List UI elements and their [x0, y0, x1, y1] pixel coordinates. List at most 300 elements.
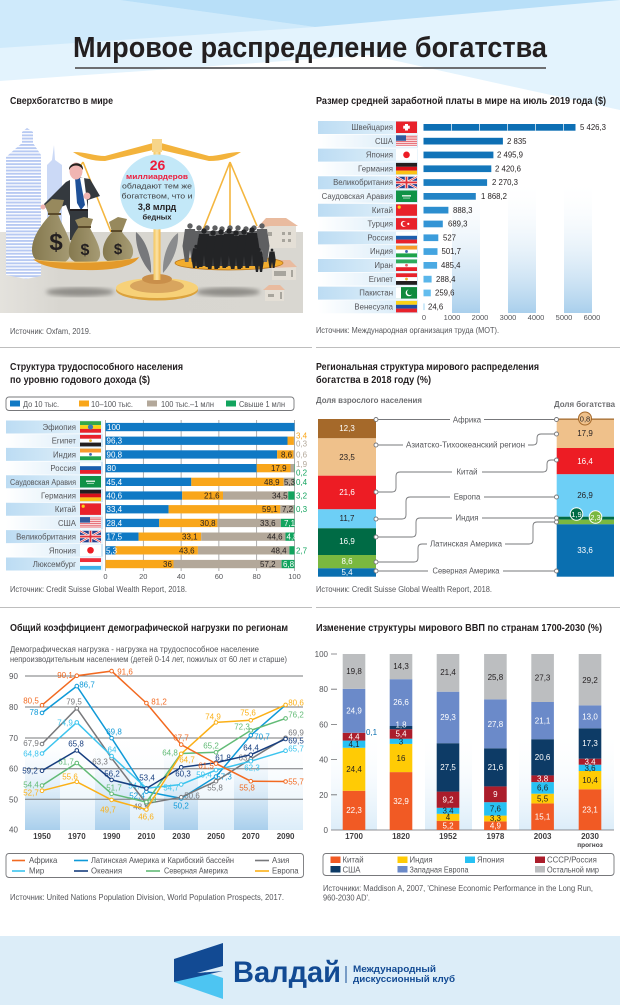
bar: 1700: 22,3 [346, 806, 362, 815]
chart background stripes [452, 180, 592, 313]
stacked bar chart: income: 3,2 [296, 492, 308, 500]
y axis: 0 [324, 826, 329, 835]
x axis labels [345, 832, 604, 849]
heading: income structure: по уровню годового дохода ($) [10, 375, 150, 386]
line: Latin America: 70,7 [254, 732, 270, 742]
y axis: 60 [319, 720, 329, 729]
illustration: right houses [257, 218, 298, 301]
illustration: money bags [32, 199, 133, 265]
line: Northern America: 61,7 [58, 758, 74, 766]
stacked bar chart: income: 7,1 [284, 519, 296, 528]
background columns [331, 730, 614, 830]
legend: regions: Африка [29, 856, 58, 865]
column: population: 5,4 [341, 568, 353, 577]
bar: 1978: 4,9 [490, 822, 502, 830]
axis: income: 100 [288, 572, 301, 581]
x axis labels: 1950 [33, 832, 51, 841]
logo: Valdai wordmark: дискуссионный клуб [353, 974, 455, 985]
bar chart: wages: 527 [443, 233, 456, 242]
line: World: 74,9 [57, 718, 73, 728]
heading: income structure: Структура трудоспособного населения [10, 361, 183, 373]
bar: 2030 forecast [579, 654, 601, 830]
legend: GDP: СССР/Россия [547, 856, 597, 864]
title: Мировое распределение богатства [73, 32, 548, 64]
bar: 2003: 3,8 [537, 774, 549, 784]
stacked bar chart: income: 8,6 [281, 450, 293, 459]
connectors and region labels: Индия [455, 514, 479, 522]
country rows with labels and flags: Великобритания [333, 178, 393, 187]
country rows with labels and flags: Саудовская Аравия [322, 192, 393, 201]
bar: 1700: 4,4 [348, 732, 360, 742]
line: Latin America [30, 680, 286, 810]
line: Oceania: 60,3 [175, 770, 191, 778]
x axis labels: 1952 [439, 832, 457, 841]
source: Maddison [323, 884, 593, 902]
line: Africa: 80,5 [23, 696, 39, 706]
heading: GDP: Изменение структуры мирового ВВП по странам 1700-2030 (%) [316, 623, 602, 634]
stacked bar chart: income: 33,1 [182, 533, 198, 542]
bar: 2003: 6,6 [537, 784, 549, 792]
axis: income: 20 [139, 572, 147, 581]
bar: 1820: 26,6 [393, 698, 409, 707]
bar chart: wages: 2 270,3 [492, 178, 518, 187]
stacked bar chart: income: 0,2 [296, 469, 308, 478]
panel: income structure [6, 361, 308, 594]
column: wealth [557, 418, 614, 577]
axis: wage [422, 313, 600, 322]
line: Europe: 49,7 [100, 806, 116, 814]
y axis labels: 40 [9, 826, 18, 835]
bar: 1952: 3,4 [442, 806, 454, 816]
axis: income: 60 [215, 572, 223, 581]
column: wealth: 26,9 [577, 491, 593, 500]
axis: wage: 6000 [584, 313, 600, 322]
logo: Valdai wordmark [233, 956, 455, 989]
axis: income: 80 [253, 572, 261, 581]
bar: 1978 [484, 654, 507, 830]
badge: India 1.9: 1,9 [571, 510, 582, 519]
legend: income: 10–100 тыс. [91, 400, 133, 409]
column: population: 21,6 [339, 488, 355, 497]
line: Asia: 63 [239, 754, 248, 762]
country rows: Россия [50, 464, 76, 473]
legend: GDP: США [342, 866, 361, 874]
country rows with labels and flags: Китай [372, 206, 393, 215]
line: Oceania: 61,8 [215, 754, 231, 762]
stacked bar chart: income: 7,2 [282, 505, 294, 514]
stacked bar chart: income: 6,8 [283, 560, 295, 569]
bar: 1952: 9,2 [442, 796, 454, 804]
stacked bar chart: income: 30,8 [200, 519, 216, 528]
source: Maddison: Источники: Maddison A, 2007, 'Chinese Economic Performance in the Long Run, [323, 884, 593, 893]
heading: regional [316, 362, 539, 386]
line: World: 54,5 [128, 782, 144, 790]
bar chart: wages: 288,4 [436, 275, 456, 284]
axis: income: 0 [103, 572, 108, 581]
line: Africa: 90,1 [57, 671, 73, 680]
line: Africa: 91,6 [117, 668, 133, 676]
chart background columns [25, 735, 303, 830]
badge: Africa 0.8: 0,8 [580, 414, 590, 424]
line: Oceania: 69,5 [288, 736, 304, 746]
bar: 1978: 3,3 [490, 814, 502, 823]
stacked bar chart: income: 0,3 [296, 439, 308, 448]
stacked bar chart: income: 17,5 [106, 533, 123, 542]
line: Northern America: 64,8 [162, 748, 178, 758]
country rows with labels and flags [318, 121, 418, 313]
line: Latin America: 78 [30, 708, 39, 717]
source: oxfam: Источник: Oxfam, 2019. [10, 327, 91, 336]
stacked bar chart: income: 40,6 [106, 492, 123, 500]
panel: regional wealth structure [316, 362, 615, 594]
axis: wage: 0 [422, 313, 426, 322]
line: Latin America: 86,7 [79, 680, 95, 690]
callout: 26 billionaires [120, 154, 195, 230]
country rows with labels and flags: Пакистан [359, 289, 393, 298]
legend: regions: Азия [272, 856, 289, 865]
x axis labels: 2090 [277, 832, 295, 841]
stacked bar chart: income: 5,3 [106, 546, 118, 555]
bar: 1820: 14,3 [393, 662, 409, 671]
stacked bar chart: income: 33,4 [106, 505, 123, 514]
country rows with labels and flags: Индия [370, 247, 393, 256]
x axis labels: 1820 [392, 832, 410, 841]
heading: regional: богатства в 2018 году (%) [316, 374, 431, 386]
line: World: 54,7 [163, 784, 179, 792]
illustration: ground [0, 232, 303, 313]
y axis labels [9, 672, 18, 835]
stacked bar chart: income: 45,4 [106, 478, 123, 487]
axis: wage: 5000 [556, 313, 572, 322]
line: World: 64 [108, 746, 117, 754]
stacked bar chart: income: 59,1 [262, 505, 278, 514]
panel: average wage [316, 95, 606, 335]
line: Africa: 61,5 [198, 762, 214, 770]
bar: 1952: 27,5 [440, 763, 456, 772]
country rows with labels and flags: Германия [358, 164, 393, 173]
y axis labels: 90 [9, 672, 18, 681]
callout: 26 billionaires: бедных [142, 212, 172, 222]
x axis labels: 2030 [172, 832, 191, 841]
bar: 1820: 5,4 [395, 730, 407, 738]
stacked bar chart: income: 43,6 [179, 546, 195, 555]
bar: 1700: 24,9 [346, 706, 362, 716]
x axis labels: 2010 [138, 832, 156, 841]
bar: 2003: 20,6 [535, 753, 551, 762]
country rows: Люксембург [33, 560, 76, 569]
footer band [0, 936, 620, 1005]
line: World: 64,8 [23, 750, 39, 758]
line: Northern America: 51,7 [106, 784, 122, 792]
line: Europe: 46,6 [138, 812, 154, 822]
line: Asia: 79,5 [66, 698, 82, 706]
column: population: 12,3 [339, 424, 355, 433]
line: Northern America: 54,4 [23, 780, 39, 790]
callout: 26 billionaires: обладают тем же [122, 182, 192, 190]
line: Europe: 64,7 [179, 756, 195, 764]
bar chart: wages: 689,3 [448, 220, 468, 229]
axis label: wealth share: Доля богатства [554, 399, 615, 409]
bar: 1952 [437, 654, 459, 830]
stacked bar chart: income: 48,4 [271, 546, 287, 555]
bar: 1978: 7,6 [490, 804, 502, 814]
stacked bar chart: income: 17,9 [271, 464, 287, 473]
stacked bar chart: income: 0,4 [296, 478, 308, 487]
line: Northern America: 72,3 [234, 722, 250, 732]
legend: GDP [323, 854, 614, 876]
logo: Valdai mark [174, 943, 223, 999]
stacked bar chart: income: 34,5 [272, 492, 288, 500]
y axis: 40 [319, 756, 329, 765]
badge: Latin America 2.3 [589, 511, 602, 523]
bar chart: wages: 2 495,9 [497, 151, 523, 160]
line: World: 65,7 [288, 744, 304, 754]
legend: GDP: Индия [410, 856, 433, 864]
line: Northern America [23, 710, 304, 804]
illustration: leaves [136, 232, 178, 273]
source: credit suisse right: Источник: Credit Suisse Global Wealth Report, 2018. [316, 585, 492, 594]
line: Europe: 80,6 [288, 698, 304, 708]
stacked bar chart: income: 5,3 [284, 478, 296, 487]
bar: 1700: 19,8 [346, 667, 362, 676]
line: Africa: 81,2 [151, 698, 167, 706]
bar: 2030 forecast: 10,4 [582, 776, 598, 785]
stacked bar chart: income: 80 [107, 464, 116, 473]
bar chart: wages: 24,6 [428, 302, 443, 311]
heading: regional: Региональная структура мирового распределения [316, 362, 539, 373]
legend: income: Свыше 1 млн [239, 400, 285, 409]
callout: 26 billionaires: богатством, что и [122, 192, 192, 200]
legend: income: 100 тыс.–1 млн [161, 400, 214, 409]
description text: Демографическая нагрузка - нагрузка на трудоспособное население [10, 645, 260, 654]
panel: superwealth [0, 95, 303, 336]
stacked bar chart: income: 21,6 [204, 492, 220, 500]
x axis labels: 2050 [207, 832, 225, 841]
illustration: scale chains [50, 162, 257, 232]
badge: Latin America 2.3: 2,3 [590, 513, 601, 522]
heading: superwealth: Сверхбогатство в мире [10, 95, 113, 107]
illustration: right pan [175, 256, 283, 270]
source: credit suisse left: Источник: Credit Suisse Global Wealth Report, 2018. [10, 585, 187, 594]
country rows with labels and flags: Иран [374, 261, 393, 270]
country rows: США [58, 519, 77, 528]
connectors and region labels: Латинская Америка [430, 540, 503, 548]
callout: 26 billionaires: 3,8 млрд [138, 202, 176, 212]
axis: wage: 2000 [472, 313, 488, 322]
y axis labels: 60 [9, 765, 18, 774]
column: population: 11,7 [340, 514, 355, 523]
line: Europe: 75,6 [240, 708, 256, 718]
x axis labels: 1700 [345, 832, 363, 841]
column: population [318, 419, 376, 577]
bar: 1700: 4,1 [348, 740, 360, 749]
line: World [23, 718, 304, 792]
panel: demographic dependency [6, 622, 304, 902]
line: Latin America: 69,8 [106, 728, 122, 736]
line: Asia: 63,3 [92, 758, 108, 766]
line: Oceania: 56,2 [104, 770, 120, 778]
legend: regions: Северная Америка [164, 866, 229, 876]
line: Latin America: 50,2 [173, 802, 189, 810]
bar: 2003: 21,1 [535, 716, 551, 726]
connectors and region labels: Северная Америка [432, 566, 500, 576]
column: wealth: 16,4 [577, 457, 593, 466]
x axis labels: прогноз [577, 842, 604, 849]
bar: 1952: 21,4 [440, 668, 456, 677]
axis label: adult population: Доля взрослого населения [316, 395, 422, 405]
line: Europe [23, 698, 304, 822]
stacked bar chart: income: 4,8 [286, 533, 298, 542]
column: population: 16,9 [339, 537, 355, 546]
connectors and region labels: Азиатско-Тихоокеанский регион [406, 440, 525, 450]
bar: 2003: 5,5 [537, 794, 549, 804]
line: Asia: 69,9 [288, 728, 304, 738]
bar chart: wages: 485,4 [441, 261, 461, 270]
line: Europe: 52,7 [23, 788, 39, 798]
stacked bar chart: income [106, 423, 308, 569]
stacked bar chart: income: 33,6 [260, 519, 276, 528]
bar: 1820 [390, 654, 412, 830]
country rows [6, 420, 103, 570]
panel: world GDP structure [315, 623, 614, 902]
bar: 1978: 27,8 [488, 720, 504, 729]
axis: wage: 3000 [500, 313, 516, 322]
country rows with labels and flags: Венесуэла [354, 302, 394, 311]
bar: 2030 forecast: 3,4 [584, 758, 596, 766]
heading: income structure [10, 361, 183, 386]
bar: 1952: 5,2 [442, 822, 454, 830]
line: Northern America: 49 [148, 796, 157, 804]
x axis labels: 1970 [68, 832, 86, 841]
description text: непроизводительным населением (детей 0-14 лет, пожилых от 60 лет и старше) [10, 655, 287, 664]
badge: Africa 0.8 [578, 412, 592, 425]
bar: 2030 forecast: 29,2 [582, 676, 598, 685]
stacked bar chart: income: 0,6 [296, 450, 308, 459]
bar: 1700: 24,4 [346, 765, 362, 774]
legend: regions: Мир [29, 866, 45, 876]
callout: 26 billionaires: миллиардеров [126, 172, 189, 181]
legend: regions: Европа [272, 866, 299, 876]
country rows with labels and flags: Япония [366, 151, 393, 160]
legend: GDP: Китай [342, 856, 364, 864]
column: population: 23,5 [339, 453, 355, 462]
illustration: money bags: $ [49, 229, 63, 256]
stacked bar chart: income: 100 [107, 423, 121, 432]
connectors and region labels [374, 416, 558, 576]
heading: demographic: Общий коэффициент демографической нагрузки по регионам [10, 622, 288, 634]
bar chart: wages: 2 835 [507, 137, 527, 146]
callout: 26 billionaires: 26 [150, 157, 165, 173]
stacked bar chart: income: 90,8 [106, 450, 123, 459]
bar: 1952: 29,3 [440, 713, 456, 722]
source: ILO: Источник: Международная организация труда (МОТ). [316, 326, 499, 335]
country rows with labels and flags: Египет [369, 275, 393, 284]
country rows: Германия [41, 492, 76, 500]
bar: 2003: 27,3 [535, 674, 551, 682]
line: Oceania: 53,4 [139, 774, 155, 782]
connectors and region labels: Китай [456, 468, 478, 476]
stacked bar chart: income: 57,2 [260, 560, 276, 569]
description text [10, 645, 287, 664]
illustration: money bags: $ [81, 242, 90, 259]
stacked bar chart: income: 36 [163, 560, 172, 569]
country rows: Саудовская Аравия [10, 478, 76, 487]
bar: 2003 [531, 654, 554, 830]
y axis [315, 650, 614, 835]
bar: 2030 forecast: 23,1 [582, 806, 598, 814]
stacked bar chart: income: 3,4 [296, 432, 308, 441]
header background [0, 0, 620, 110]
badge: India 1.9 [570, 508, 583, 520]
country rows: Япония [49, 546, 76, 555]
x axis labels: 2003 [534, 832, 552, 841]
axis: income: 40 [177, 572, 185, 581]
stacked bar chart: income: 44,6 [267, 533, 283, 542]
column: population: 8,6 [341, 557, 353, 566]
country rows: Индия [53, 450, 76, 459]
x axis labels: 1978 [487, 832, 505, 841]
line: Asia [23, 698, 304, 812]
line: Asia: 67,9 [23, 739, 39, 748]
illustration: ground shadows [46, 288, 260, 296]
legend: income: До 10 тыс. [23, 400, 59, 409]
bar chart: wages: 2 420,6 [495, 164, 521, 173]
bar chart: wages [424, 123, 606, 311]
line: World: 62,3 [244, 764, 260, 772]
stacked bar chart: income: 0,3 [296, 505, 308, 514]
x axis labels: 2070 [242, 832, 260, 841]
country rows: Китай [55, 505, 76, 514]
illustration: scale pillar and base [73, 139, 241, 300]
legend: regions: Латинская Америка и Карибский бассейн [91, 856, 234, 865]
line: Asia: 55,8 [207, 784, 223, 792]
y axis labels: 70 [9, 734, 18, 743]
stacked bar chart: income: 96,3 [106, 437, 123, 446]
line: Oceania: 59,2 [22, 766, 38, 776]
line: Africa [23, 668, 304, 792]
illustration: money bags: $ [114, 241, 123, 258]
x axis labels [33, 832, 295, 841]
line: World: 59,4 [196, 770, 212, 780]
bar: 2003: 15,1 [535, 812, 551, 822]
line: Oceania: 65,8 [68, 740, 84, 748]
source: UN: Источник: United Nations Population Division, World Population Prospects, 2017. [10, 893, 284, 902]
bar: 1820: 32,9 [393, 797, 409, 806]
legend: GDP: Остальной мир [547, 866, 600, 874]
illustration: skyscrapers [6, 128, 62, 279]
country rows: Великобритания [16, 533, 76, 542]
bar: 1820: 16 [397, 754, 406, 763]
connectors and region labels: Европа [454, 492, 481, 502]
y axis labels: 80 [9, 703, 18, 712]
label: 0.1 USA 1700: 0,1 [366, 728, 378, 737]
legend: income [6, 397, 294, 410]
line: Northern America: 76,2 [288, 710, 304, 720]
logo: Valdai wordmark: Международный [353, 964, 436, 975]
country rows: Египет [52, 437, 76, 446]
source: Maddison: 960-2030 AD'. [323, 894, 370, 902]
x axis labels: 1990 [103, 832, 121, 841]
line: Europe: 74,9 [205, 712, 221, 722]
bar: 1820: 1,8 [395, 720, 407, 730]
bar chart: wages: 259,6 [435, 289, 455, 298]
bar: 1978: 21,6 [488, 763, 504, 772]
bar: 2030 forecast: 17,3 [582, 739, 598, 748]
x axis labels: 2030 [581, 832, 599, 841]
stacked bar chart: income: 28,4 [106, 519, 123, 528]
bar chart: wages: 501,7 [442, 247, 461, 256]
y axis: 100 [315, 650, 329, 659]
